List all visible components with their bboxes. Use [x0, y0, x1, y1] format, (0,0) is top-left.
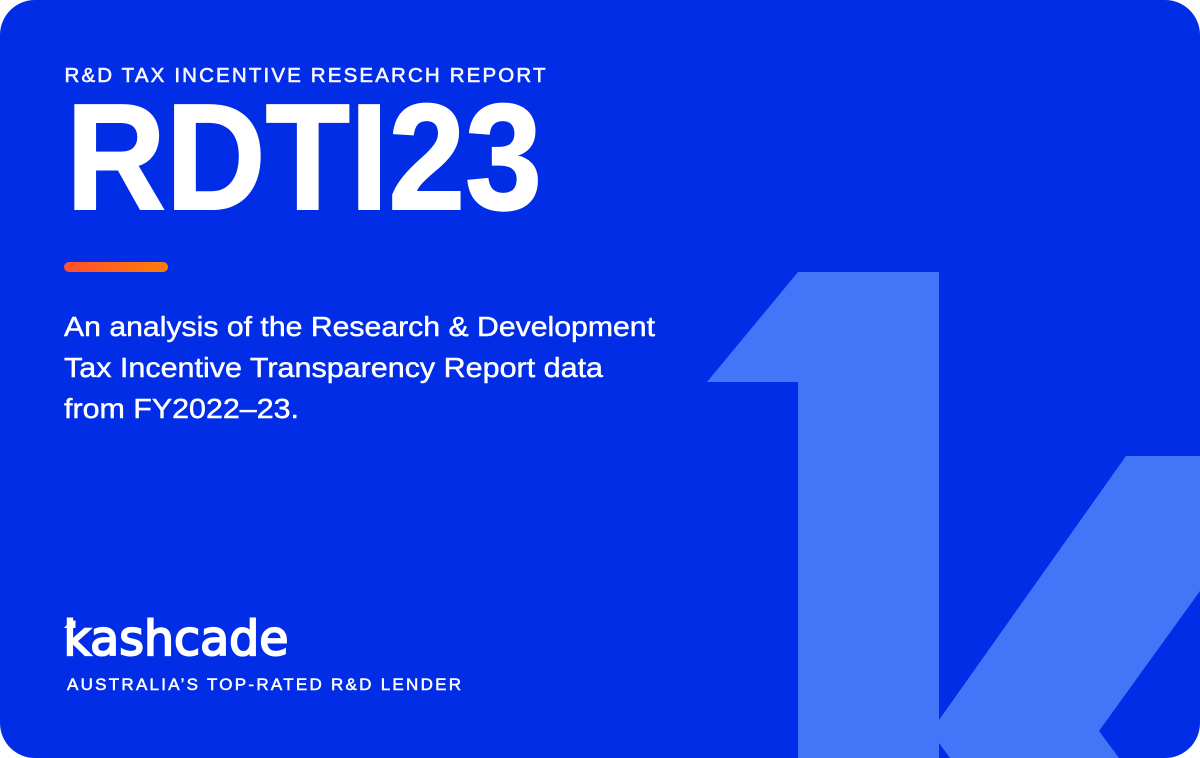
description text: Tax Incentive Transparency Report data	[64, 352, 603, 383]
logo: kashcade wordmark: kashcade	[64, 611, 288, 667]
description text: from FY2022–23.	[64, 393, 299, 424]
tagline: AUSTRALIA’S TOP-RATED R&D LENDER	[67, 675, 461, 694]
description text	[64, 311, 655, 424]
description text: An analysis of the Research & Development	[64, 311, 655, 342]
title: RDTI23	[66, 72, 542, 241]
accent bar	[64, 262, 168, 272]
icon: large kashcade k watermark	[707, 272, 1200, 758]
eyebrow heading: R&D TAX INCENTIVE RESEARCH REPORT	[64, 64, 546, 87]
